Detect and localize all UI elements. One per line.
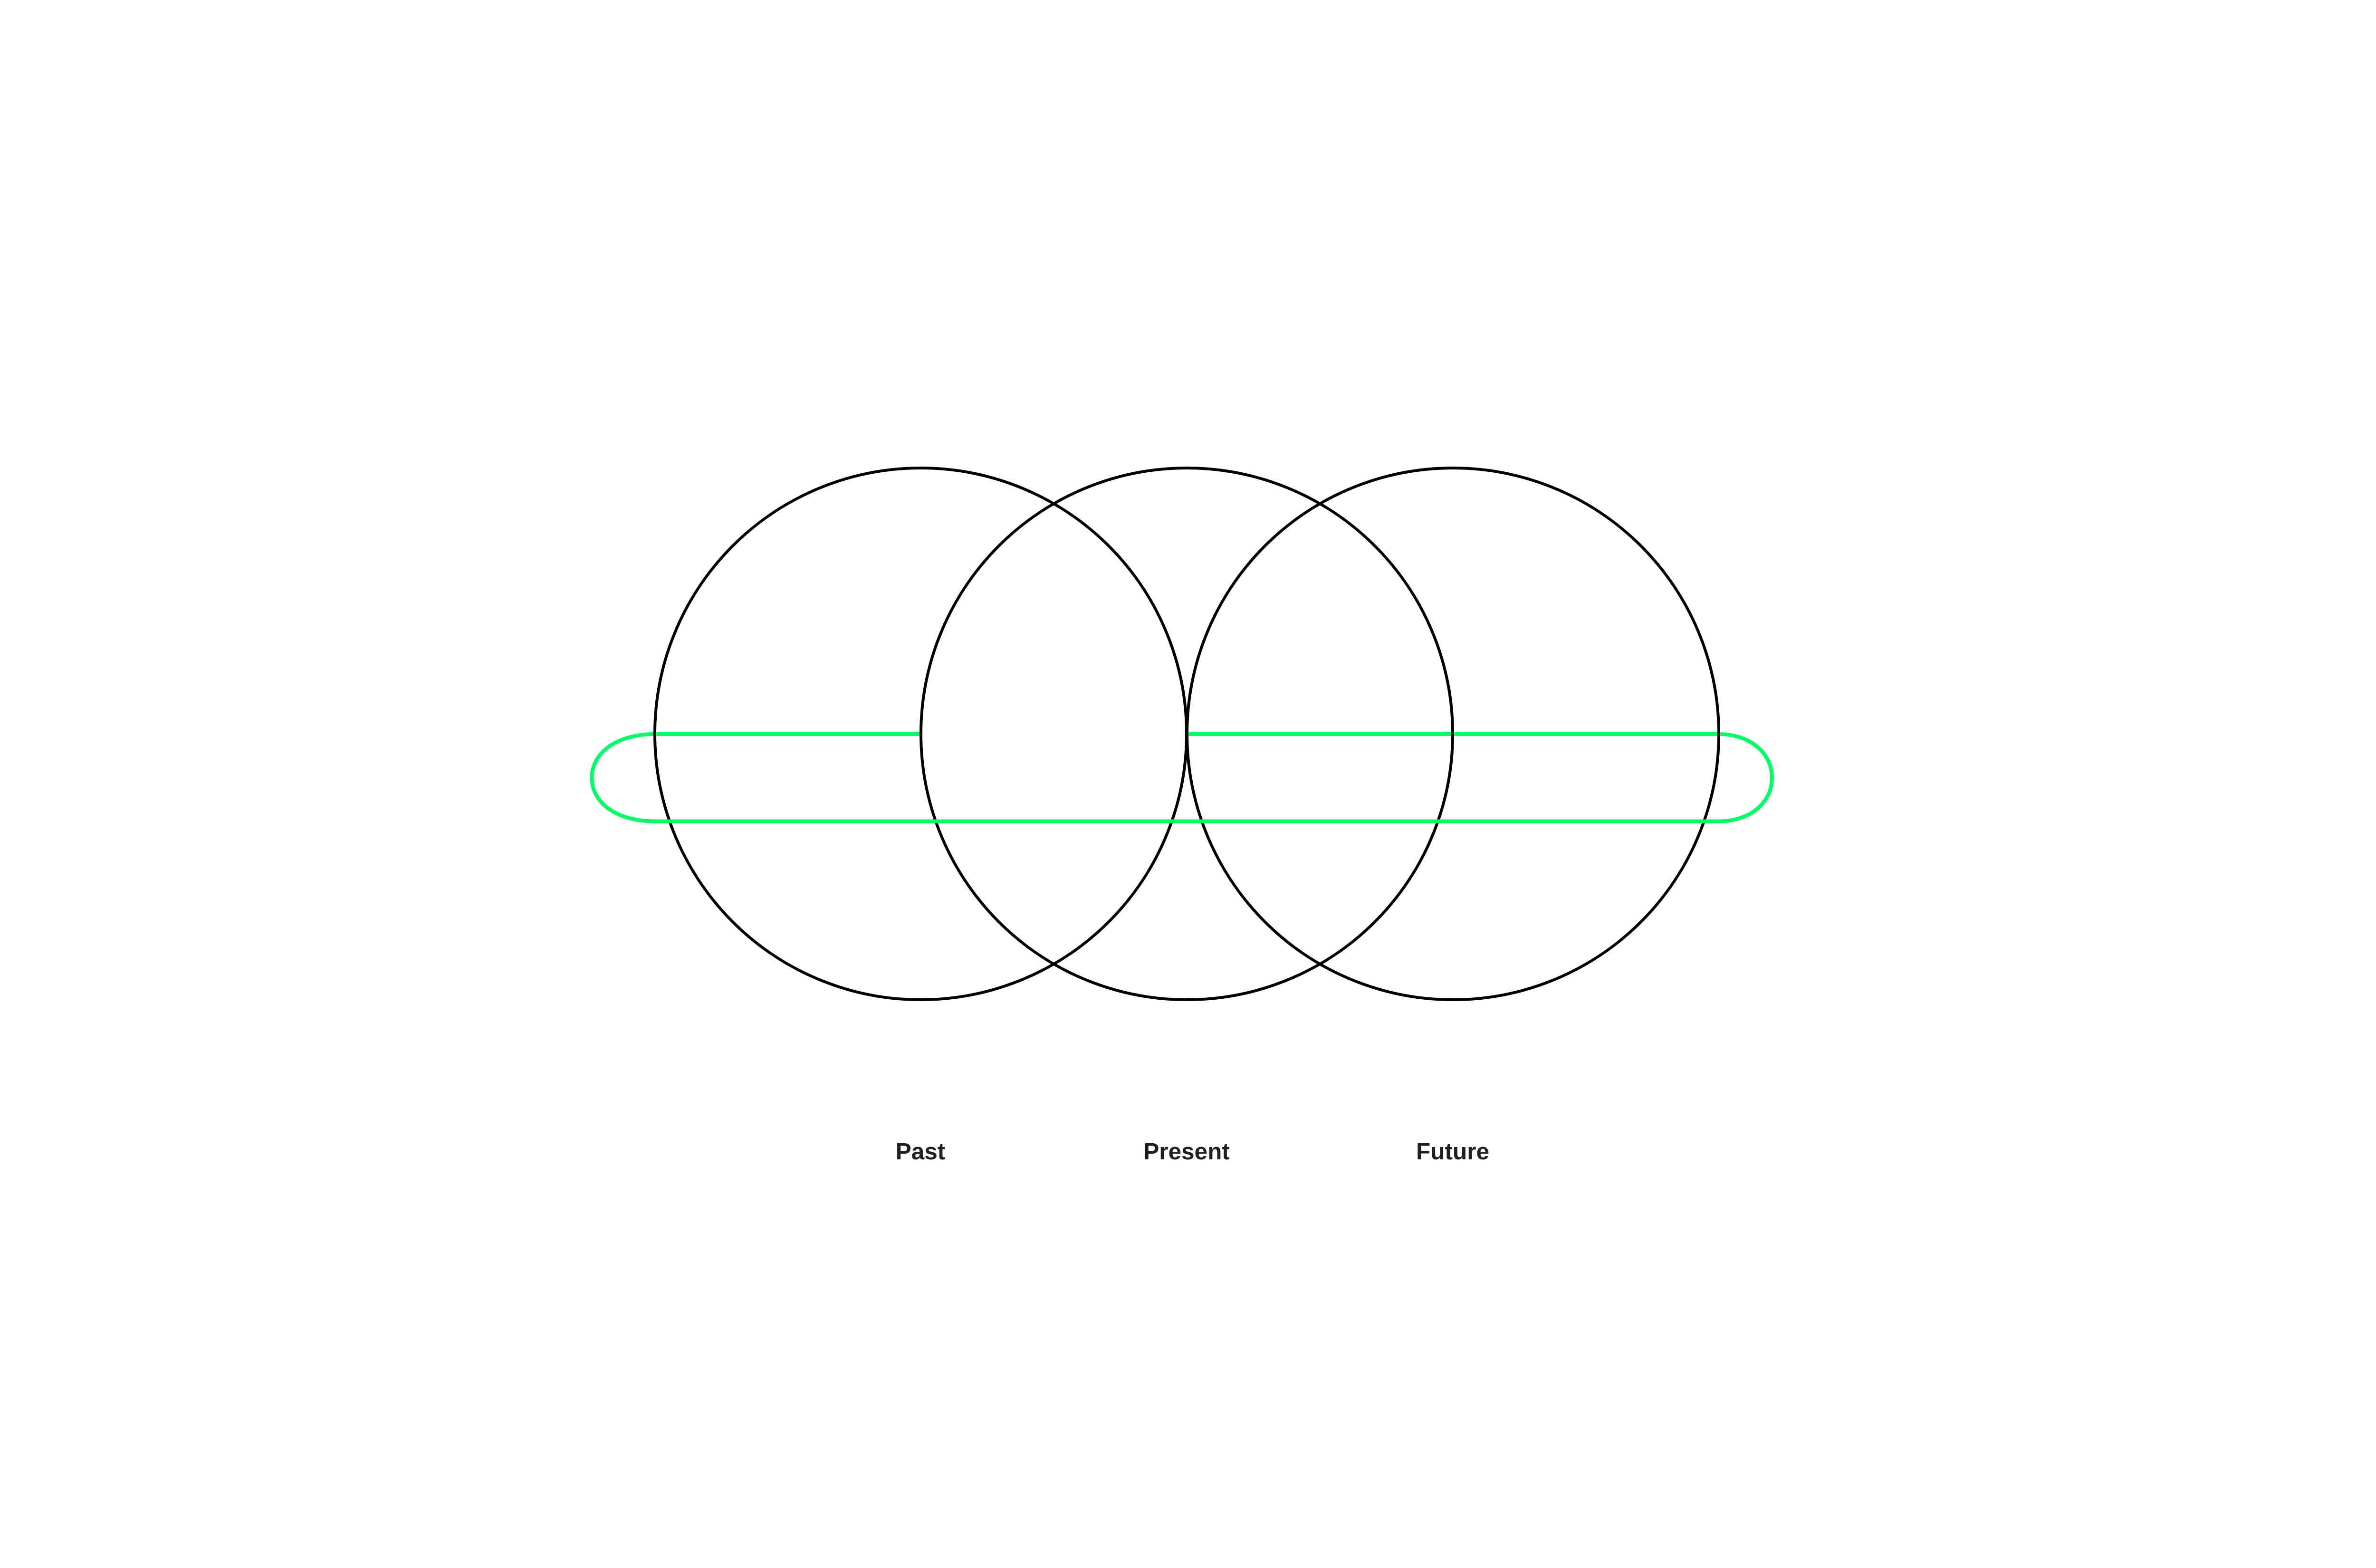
label: present: Present [1143, 1138, 1230, 1165]
circle: past [655, 468, 1187, 1000]
label: past: Past [896, 1138, 945, 1165]
labels [896, 1138, 1489, 1165]
three overlapping circles [655, 468, 1719, 1000]
circle: present [921, 468, 1453, 1000]
label: future: Future [1416, 1138, 1489, 1165]
circle: future [1187, 468, 1719, 1000]
green pill: lower line [655, 819, 1719, 823]
green pill: upper outline segments [592, 734, 1772, 821]
